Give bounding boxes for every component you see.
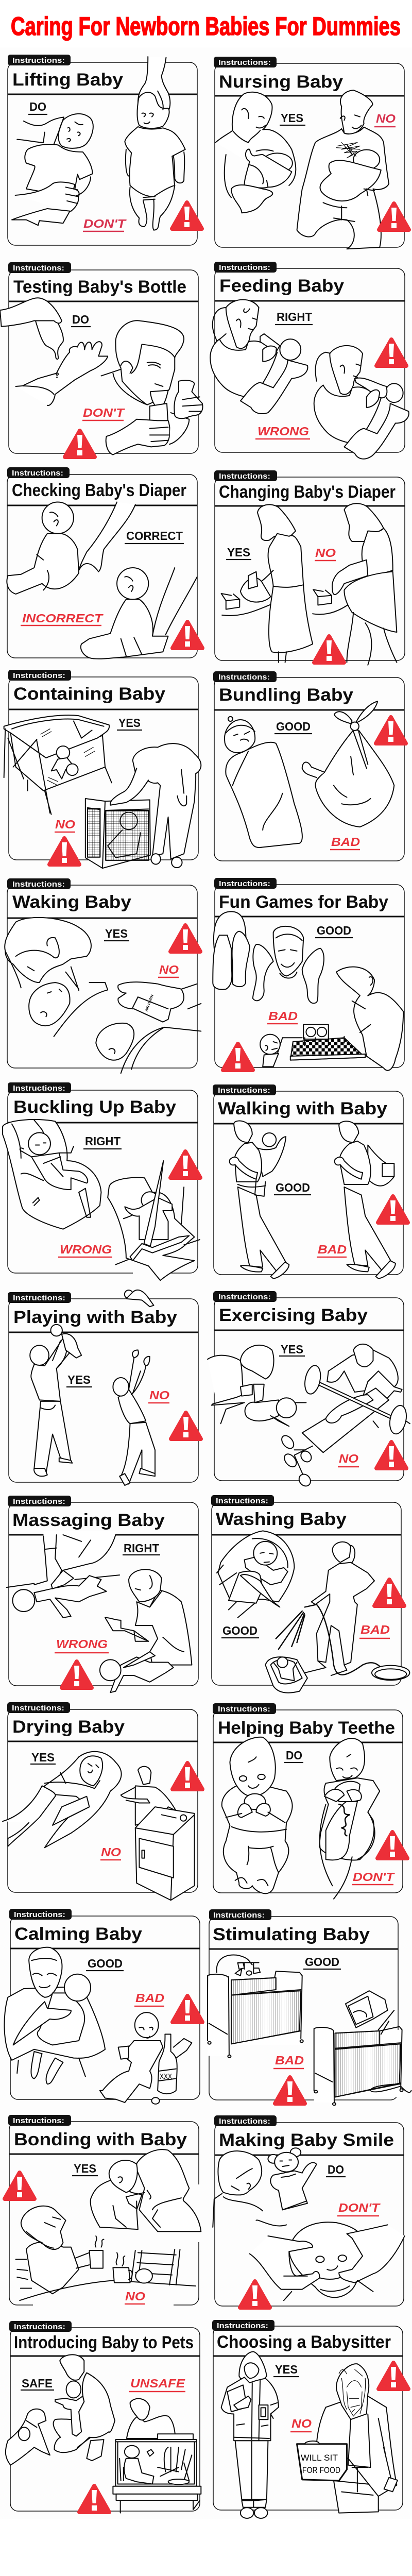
panel: Changing Baby's Diaper (214, 470, 405, 665)
panel: Bundling Baby (213, 671, 406, 861)
tag: instructions: Instructions: (216, 1497, 268, 1505)
illustration: hand washing versus hose (217, 1531, 409, 1693)
panel: Lifting Baby (8, 55, 202, 245)
illustration: baby carrier versus backpack (230, 1121, 396, 1279)
tag: instructions (214, 262, 277, 273)
heading: Playing with Baby: Playing with Baby (13, 1308, 177, 1327)
label: GOOD: GOOD (305, 1955, 339, 1969)
panel: Calming Baby (4, 1909, 202, 2104)
illustration: baby's stretched face (250, 2220, 405, 2300)
tag: instructions (9, 1909, 72, 1920)
heading: Checking Baby's Diaper: Checking Baby's Diaper (12, 481, 186, 500)
heading: Feeding Baby: Feeding Baby (219, 276, 344, 296)
tag: instructions (8, 1082, 71, 1093)
label: YES: YES (105, 927, 128, 940)
tag: instructions: Instructions: (12, 880, 65, 889)
heading: Drying Baby: Drying Baby (12, 1717, 125, 1737)
label: INCORRECT: INCORRECT (22, 612, 104, 625)
panel: Buckling Up Baby (3, 1082, 200, 1280)
illustration: hugging baby versus drunk baby (4, 1947, 192, 2104)
tag: instructions: Instructions: (13, 671, 65, 680)
icon: warning triangle (49, 838, 79, 865)
label: GOOD: GOOD (222, 1624, 258, 1637)
heading: Waking Baby: Waking Baby (12, 892, 131, 912)
icon: warning triangle (173, 1763, 202, 1789)
tag: instructions: Instructions: (13, 2116, 64, 2125)
label: WRONG: WRONG (258, 425, 309, 438)
label: YES: YES (74, 2162, 96, 2175)
icon: warning triangle (173, 1996, 202, 2022)
heading: Bonding with Baby: Bonding with Baby (14, 2130, 187, 2149)
illustration: crib mobile versus crib TV (208, 1955, 411, 2105)
illustration: peek-a-boo versus chess (213, 911, 403, 1071)
icon: warning triangle (275, 2077, 305, 2104)
tag: instructions: Instructions: (218, 673, 270, 682)
illustration: dog versus fish tank (6, 2354, 201, 2513)
tag: instructions: Instructions: (13, 1084, 65, 1093)
panel: Massaging Baby (7, 1496, 198, 1692)
panel: Making Baby Smile (213, 2115, 405, 2308)
panel: Fun Games for Baby (213, 878, 404, 1071)
heading: Containing Baby: Containing Baby (13, 684, 165, 704)
label: WRONG: WRONG (60, 1243, 112, 1256)
text: cardboard sign (301, 2453, 340, 2475)
illustration: massage versus basting baby (7, 1531, 192, 1692)
label: BAD: BAD (275, 2054, 304, 2067)
tag: instructions (209, 1909, 271, 1920)
icon: warning triangle (170, 1151, 200, 1178)
icon: warning triangle (374, 1580, 404, 1606)
icon: warning triangle (172, 202, 202, 229)
icon: warning triangle (377, 1832, 407, 1858)
icon: warning triangle (223, 1044, 253, 1070)
illustration: checking diaper correctly and incorrectly (7, 502, 197, 659)
panel: Choosing a Babysitter (212, 2320, 408, 2518)
panel: Drying Baby (3, 1702, 202, 1900)
panel: Nursing Baby (214, 57, 409, 249)
heading: Testing Baby's Bottle: Testing Baby's Bottle (13, 277, 186, 297)
label: YES: YES (67, 1373, 91, 1386)
panel: Exercising Baby (208, 1291, 410, 1488)
illustration: teething ring versus shoe (222, 1737, 380, 1899)
label: NO: NO (101, 1845, 121, 1859)
tag: instructions (212, 2320, 274, 2331)
label: BAD: BAD (331, 835, 360, 849)
heading: Washing Baby: Washing Baby (216, 1510, 347, 1529)
icon: warning triangle (376, 717, 406, 743)
label: NO: NO (125, 2290, 145, 2303)
tag: instructions (214, 878, 277, 889)
illustration: student sitter versus vagrant (221, 2352, 398, 2518)
tag: instructions (213, 671, 277, 682)
icon: warning triangle (379, 204, 409, 230)
illustration: two women changing diaper (221, 503, 397, 665)
tag: instructions: Instructions: (217, 2321, 268, 2330)
icon: warning triangle (379, 2363, 408, 2389)
icon: warning triangle (5, 2173, 35, 2199)
illustration: testing bottle on wrist versus drinking (0, 298, 202, 455)
label: YES: YES (281, 1343, 303, 1356)
panel: Waking Baby (5, 878, 201, 1073)
label: UNSAFE: UNSAFE (130, 2377, 185, 2390)
panel: Stimulating Baby (208, 1909, 411, 2105)
tag: instructions (7, 878, 71, 889)
label: NO: NO (159, 963, 179, 976)
tag: instructions (8, 2115, 71, 2126)
label: YES: YES (31, 1751, 55, 1764)
icon: warning triangle (62, 1662, 92, 1688)
heading: Helping Baby Teethe: Helping Baby Teethe (218, 1718, 395, 1738)
text: bottle label: XXX (160, 2072, 172, 2081)
icon: warning triangle (378, 1196, 408, 1223)
tag: instructions (8, 262, 71, 273)
label: DO: DO (29, 100, 46, 113)
heading: Making Baby Smile: Making Baby Smile (219, 2130, 394, 2150)
panel: Bonding with Baby (5, 2115, 201, 2305)
label: NO: NO (376, 112, 396, 125)
tag: instructions: Instructions: (219, 263, 270, 272)
tag: instructions: Instructions: (218, 1086, 270, 1095)
label: NO: NO (291, 2417, 312, 2430)
tag: instructions: Instructions: (12, 469, 63, 478)
tag: instructions: Instructions: (14, 2323, 65, 2331)
heading: Choosing a Babysitter: Choosing a Babysitter (217, 2332, 391, 2352)
heading: Exercising Baby: Exercising Baby (219, 1306, 368, 1325)
heading: Lifting Baby: Lifting Baby (12, 70, 123, 90)
tag: instructions: Instructions: (14, 1910, 65, 1919)
label: DO: DO (328, 2163, 344, 2176)
label: GOOD: GOOD (276, 1181, 310, 1194)
label: BAD: BAD (360, 1623, 390, 1636)
heading: Buckling Up Baby: Buckling Up Baby (13, 1097, 176, 1117)
heading: Stimulating Baby: Stimulating Baby (213, 1925, 370, 1944)
illustration: lifting baby versus throwing baby (30, 1290, 155, 1485)
label: BAD: BAD (268, 1009, 298, 1023)
icon: warning triangle (314, 636, 344, 663)
icon: warning triangle (171, 1413, 201, 1439)
label: YES: YES (227, 546, 250, 559)
label: DON'T: DON'T (83, 217, 127, 230)
illustration: mother with baby versus ignoring baby (91, 2149, 201, 2231)
tag: instructions (214, 470, 277, 481)
label: YES: YES (118, 716, 141, 730)
heading: Massaging Baby: Massaging Baby (12, 1511, 165, 1530)
tag: instructions (7, 1702, 70, 1713)
label: DO: DO (72, 313, 89, 326)
illustration: mother and father nursing (215, 90, 389, 249)
label: DON'T: DON'T (353, 1870, 395, 1884)
tag: instructions: Instructions: (219, 879, 270, 888)
illustration: kiss versus air horn (5, 918, 201, 1073)
label: NO: NO (315, 546, 336, 560)
illustration: towel versus clothes dryer (3, 1752, 195, 1900)
label: GOOD: GOOD (317, 924, 351, 937)
panel: Walking with Baby (213, 1084, 408, 1279)
text: cardboard sign: WILL SIT (301, 2453, 338, 2463)
icon: warning triangle (376, 340, 406, 366)
panel: Testing Baby's Bottle (0, 262, 202, 457)
text: air horn can label: AIR HORN (145, 994, 154, 1012)
tag: instructions (213, 1291, 277, 1302)
illustration: car seat right and wrong (3, 1120, 200, 1280)
label: NO: NO (149, 1388, 169, 1402)
heading: Fun Games for Baby: Fun Games for Baby (219, 892, 388, 912)
tag: instructions (7, 467, 70, 478)
icon: warning triangle (79, 2486, 109, 2512)
icon: warning triangle (173, 622, 202, 648)
heading: Introducing Baby to Pets: Introducing Baby to Pets (14, 2333, 194, 2352)
tag: instructions (214, 57, 277, 67)
label: RIGHT: RIGHT (277, 310, 312, 324)
label: RIGHT: RIGHT (124, 1541, 159, 1555)
heading: Walking with Baby: Walking with Baby (218, 1099, 387, 1118)
illustration: playpen versus cage (4, 715, 201, 868)
label: YES: YES (281, 111, 303, 125)
tag: instructions: Instructions: (13, 1497, 65, 1506)
icon: warning triangle (65, 431, 95, 457)
tag: instructions: Instructions: (218, 58, 271, 67)
label: NO: NO (55, 818, 75, 831)
tag: instructions (8, 670, 71, 681)
label: YES: YES (275, 2363, 298, 2376)
label: GOOD: GOOD (276, 720, 311, 733)
heading: Bundling Baby: Bundling Baby (219, 685, 353, 705)
tag: instructions: Instructions: (219, 472, 270, 481)
label: DO: DO (286, 1749, 302, 1762)
tag: instructions (8, 55, 71, 65)
tag: instructions (211, 1495, 274, 1506)
label: BAD: BAD (135, 1991, 164, 2005)
text: cardboard sign: FOR FOOD (302, 2465, 340, 2475)
tag: instructions: Instructions: (213, 1911, 265, 1920)
label: DON'T: DON'T (83, 406, 125, 419)
illustration: right and wrong bottle feeding (210, 300, 409, 459)
panel: Containing Baby (4, 670, 201, 868)
panel: Feeding Baby (210, 262, 409, 459)
tag: instructions: Instructions: (12, 1704, 64, 1713)
tag: instructions: Instructions: (12, 56, 65, 65)
panel: Washing Baby (211, 1495, 409, 1693)
tag: instructions (214, 2115, 277, 2126)
tag: instructions (8, 1496, 71, 1506)
tag: instructions: Instructions: (13, 1294, 65, 1302)
label: SAFE: SAFE (22, 2377, 53, 2390)
illustration: lower scene with coffee table (16, 2206, 196, 2300)
illustration: baby lifted by shirt and by head (12, 57, 185, 230)
heading: Calming Baby: Calming Baby (14, 1924, 142, 1944)
icon: warning triangle (376, 1442, 406, 1468)
illustration: gentle exercise versus weight bench (208, 1344, 410, 1488)
tag: instructions (213, 1703, 276, 1714)
panel: Checking Baby's Diaper (7, 467, 202, 659)
tag: instructions (213, 1084, 276, 1095)
tag: instructions: Instructions: (219, 2117, 270, 2126)
label: CORRECT: CORRECT (126, 529, 183, 543)
label: RIGHT: RIGHT (85, 1134, 121, 1148)
illustration: swaddle versus tied sack (225, 701, 394, 848)
tag: instructions (8, 1292, 71, 1303)
label: DON'T: DON'T (338, 2201, 381, 2214)
tag: instructions: Instructions: (13, 264, 64, 273)
panel: Introducing Baby to Pets (6, 2321, 201, 2513)
panel: Helping Baby Teethe (213, 1703, 407, 1899)
tag: instructions (9, 2321, 72, 2332)
tag: instructions: Instructions: (218, 1705, 270, 1714)
label: BAD: BAD (318, 1243, 347, 1256)
panel: Playing with Baby (8, 1290, 201, 1485)
label: NO: NO (339, 1452, 358, 1465)
icon: warning triangle (170, 925, 200, 952)
heading: Nursing Baby: Nursing Baby (219, 72, 343, 92)
label: WRONG: WRONG (56, 1637, 108, 1651)
illustration: puppet versus stretching baby's mouth (213, 2148, 317, 2227)
tag: instructions: Instructions: (218, 1293, 271, 1301)
icon: warning triangle (240, 2281, 270, 2308)
label: GOOD: GOOD (88, 1957, 123, 1970)
